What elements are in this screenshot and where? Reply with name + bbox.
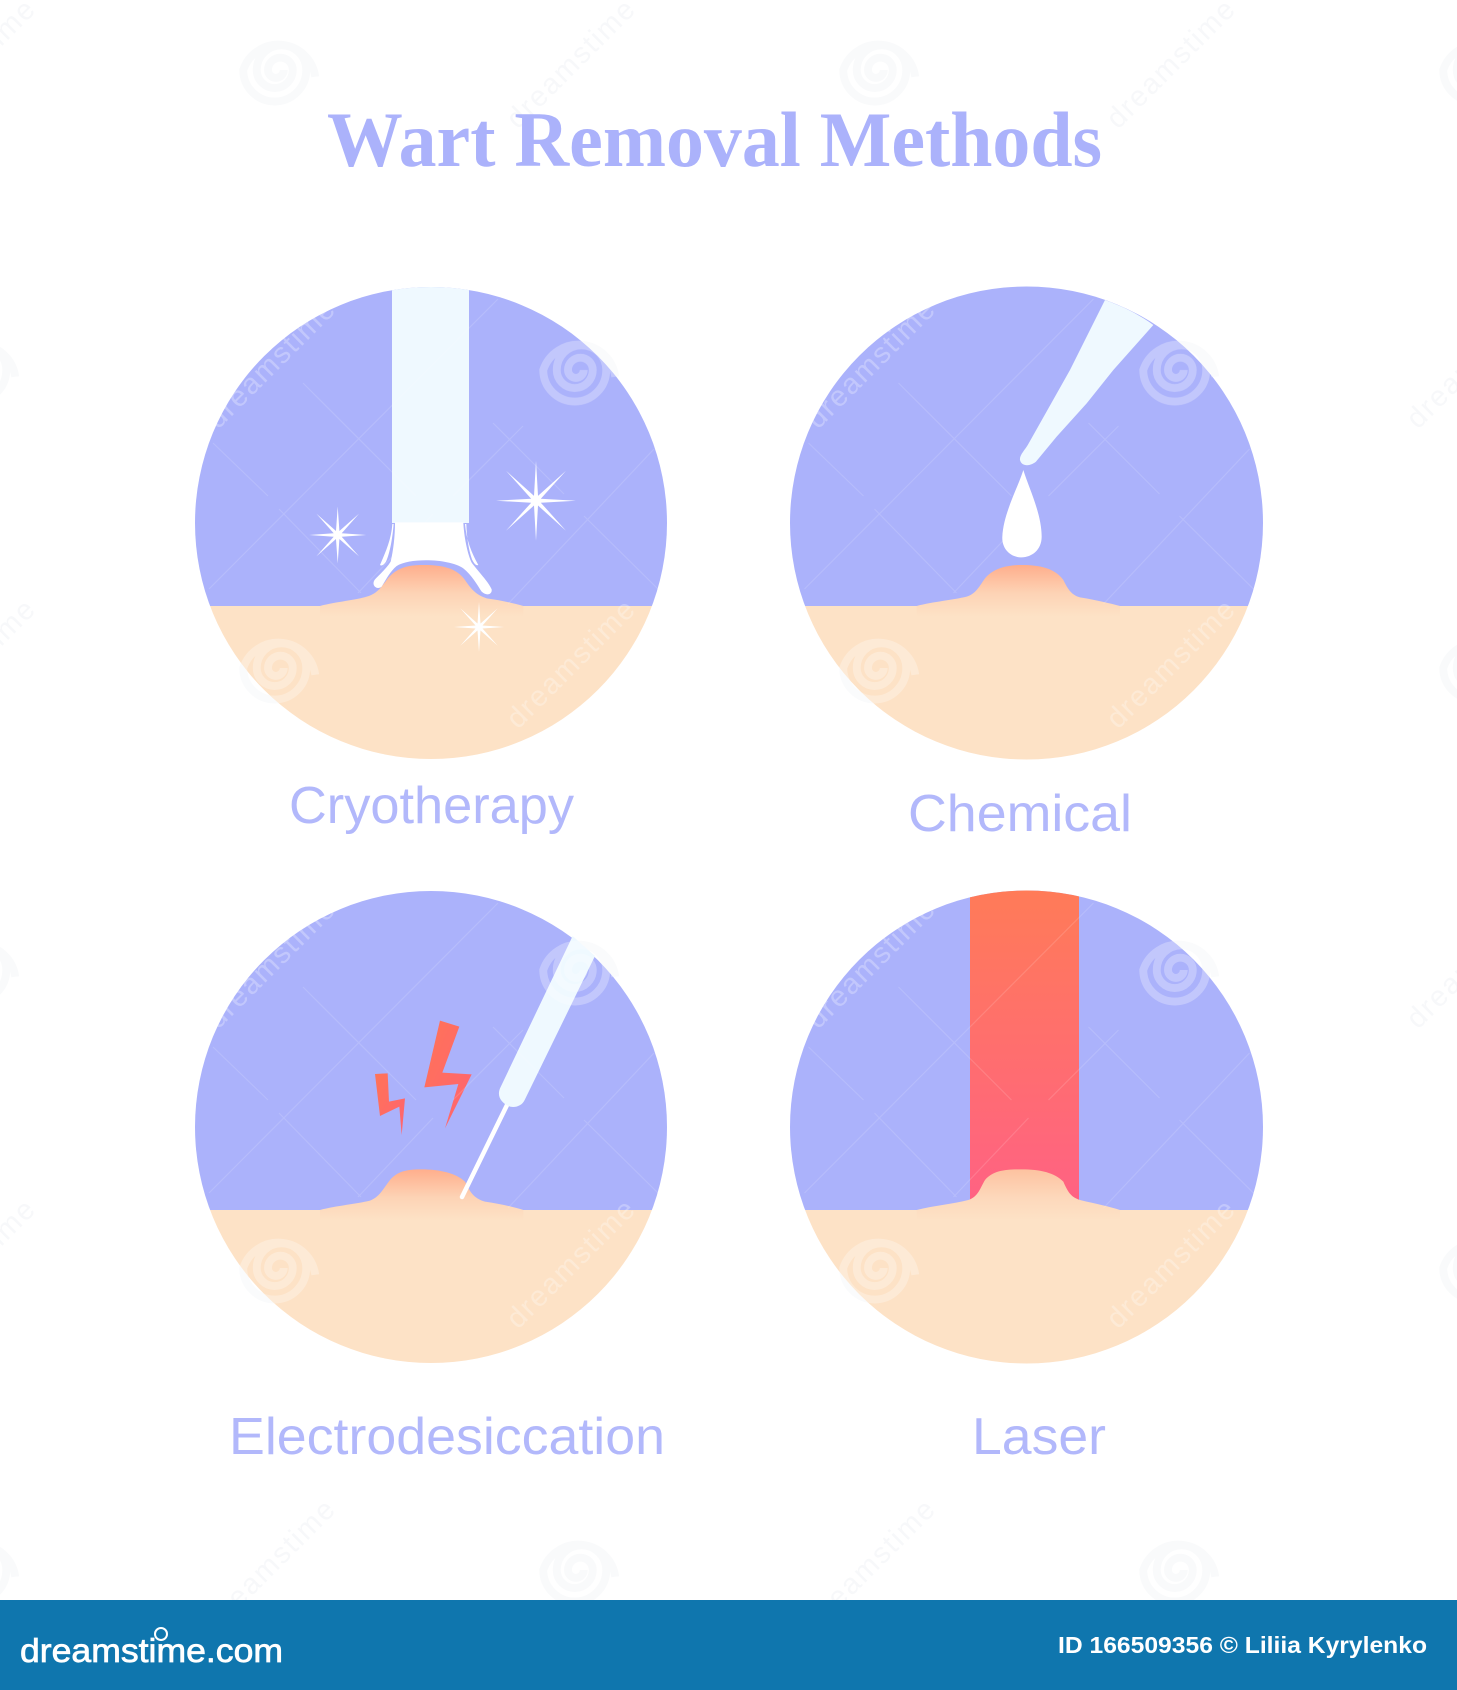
dropper [1020, 300, 1153, 465]
circle background [190, 885, 670, 1370]
watermark: background pattern on white: dreamstime [800, 1492, 943, 1635]
watermark: overlay on circles: dreamstime [500, 592, 643, 735]
electrode handle [499, 936, 595, 1107]
circle background [785, 885, 1270, 1370]
wart [917, 565, 1120, 617]
drop of chemical [1002, 470, 1042, 557]
panel: chemical [785, 280, 1270, 766]
icon: snowflake left [309, 506, 366, 564]
watermark: background pattern on white [195, 286, 1263, 1364]
icon: small lightning bolt [375, 1073, 405, 1135]
cryo applicator tube [392, 280, 469, 523]
watermark: overlay on circles: dreamstime [200, 892, 343, 1035]
watermark: overlay on circles: dreamstime [800, 292, 943, 435]
cryo applicator cap [374, 522, 492, 594]
wart [320, 565, 523, 617]
footer credit: ID 166509356 © Liliia Kyrylenko [1058, 1632, 1427, 1658]
footer band [0, 1600, 1457, 1690]
label: cryotherapy: Cryotherapy [289, 777, 574, 835]
electrode needle [462, 1103, 508, 1197]
icon: snowflake large [496, 461, 576, 541]
watermark: overlay on circles: dreamstime [1100, 1192, 1243, 1335]
watermark: overlay on circles: dreamstime [200, 292, 343, 435]
laser beam [970, 890, 1079, 1202]
label: laser: Laser [972, 1408, 1106, 1466]
label: chemical: Chemical [908, 785, 1132, 843]
panel: laser [785, 885, 1270, 1370]
footer logo: dreamstime.com: dreamstime.com [20, 1632, 283, 1669]
watermark: overlay on circles: dreamstime [500, 1192, 643, 1335]
circle background [190, 280, 670, 766]
watermark: background pattern on white: dreamstime [200, 1492, 343, 1635]
watermark: overlay on circles: dreamstime [1100, 592, 1243, 735]
wart [917, 1169, 1120, 1221]
panel: electrodesiccation [190, 885, 670, 1370]
watermark: overlay on circles: dreamstime [800, 892, 943, 1035]
panel: cryotherapy [190, 280, 670, 766]
title: Wart Removal Methods [327, 96, 1102, 183]
watermark: overlay on circles [200, 292, 1254, 1335]
wart [320, 1169, 523, 1221]
label: electrodesiccation: Electrodesiccation [229, 1408, 665, 1466]
icon: large lightning bolt [424, 1021, 472, 1128]
icon: snowflake in skin [454, 602, 504, 652]
circle background [785, 280, 1270, 766]
